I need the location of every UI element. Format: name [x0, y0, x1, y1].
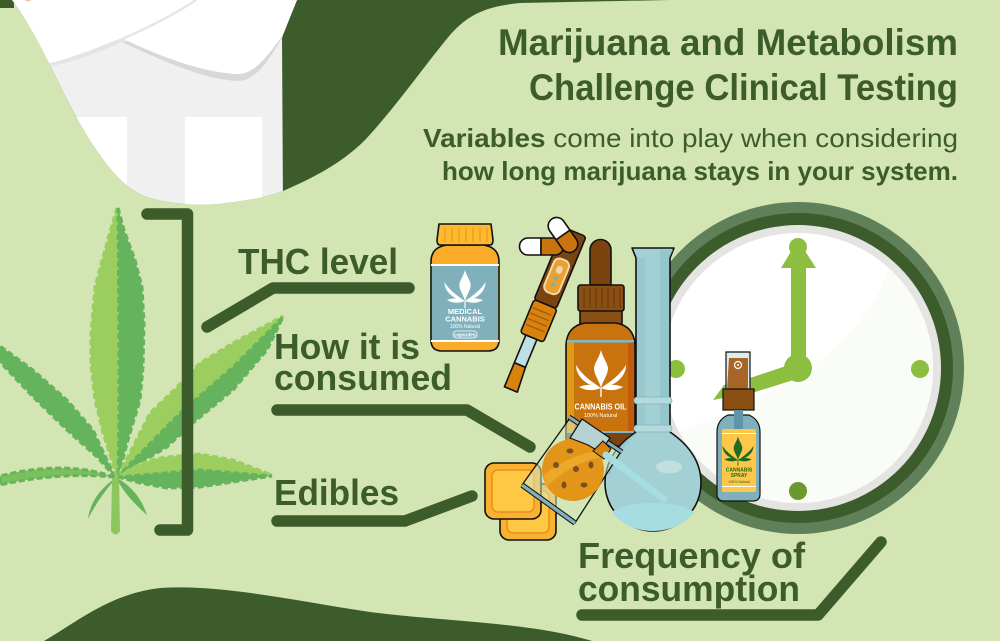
pill bottle: 100% Natural	[450, 324, 480, 330]
bottom dark wave	[44, 587, 592, 641]
bracket	[147, 214, 188, 530]
label: How it is consumed	[274, 326, 530, 447]
spray bottle: SPRAY	[731, 473, 748, 479]
title: Challenge Clinical Testing	[529, 67, 958, 108]
title: Marijuana and Metabolism	[498, 22, 958, 63]
cookie in bag	[522, 417, 664, 523]
icon: cannabis leaf	[0, 208, 283, 534]
title	[498, 22, 958, 108]
label: THC level	[207, 241, 409, 327]
spray bottle: CANNABIS	[726, 468, 753, 474]
label: Frequency of consumption: consumption	[578, 568, 800, 609]
pill bottle: capsules	[454, 332, 476, 338]
oil bottle: CANNABIS OIL	[574, 402, 627, 412]
label: Edibles: Edibles	[274, 472, 399, 513]
label: Frequency of consumption: Frequency of	[578, 535, 806, 576]
pill bottle: CANNABIS	[445, 314, 485, 324]
spray bottle	[717, 352, 760, 501]
spray bottle: 100% Natural	[728, 480, 750, 484]
subtitle	[423, 123, 958, 186]
subtitle: how long marijuana stays in your system.	[442, 156, 958, 186]
oil bottle	[566, 240, 635, 446]
vape pen	[499, 227, 587, 394]
pill bottle	[431, 224, 499, 351]
top dark wave with lab coat	[0, 0, 670, 212]
oil bottle: 100% Natural	[584, 413, 617, 419]
gummy squares	[485, 463, 556, 540]
label: How it is consumed: How it is	[274, 326, 420, 367]
pill bottle: MEDICAL	[448, 307, 482, 316]
bong	[605, 248, 701, 531]
capsules	[520, 214, 581, 256]
label: THC level: THC level	[238, 241, 398, 282]
label: Edibles	[274, 472, 472, 521]
label: How it is consumed: consumed	[274, 357, 452, 398]
subtitle: Variables come into play when considering	[423, 123, 958, 153]
clock	[632, 202, 964, 534]
label: Frequency of consumption	[578, 535, 881, 615]
